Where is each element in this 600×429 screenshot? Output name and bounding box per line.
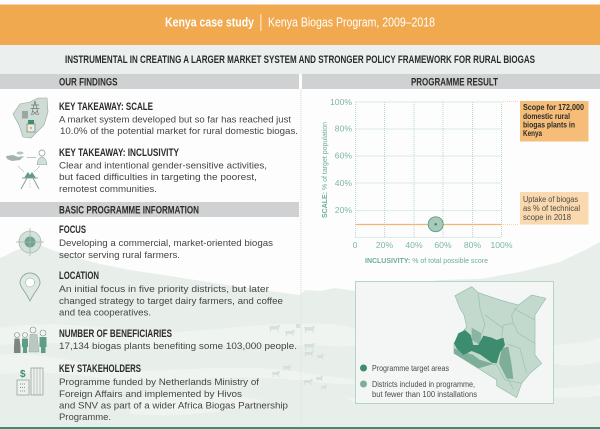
callout: uptake: Uptake of biogas: [523, 195, 578, 204]
x axis labels: 0: [353, 240, 358, 250]
text: focus: FOCUS: [59, 224, 86, 236]
text: key takeaway scale: [59, 101, 298, 137]
icon: focus target: [16, 228, 44, 256]
map of Kenya: [454, 287, 546, 398]
legend: Programme target areas: [372, 364, 449, 373]
x axis title: INCLUSIVITY: % of total possible score: [365, 256, 488, 265]
callout: scope: Scope for 172,000: [523, 102, 584, 112]
subtitle band: [0, 45, 600, 74]
y axis labels: 60%: [335, 150, 352, 160]
cattle: [269, 324, 327, 390]
icon: inclusivity: [6, 150, 47, 189]
callout: uptake: as % of technical: [523, 204, 580, 213]
y axis labels: 80%: [335, 124, 352, 134]
text: key takeaway inclusivity: but faced difficulties in targeting the poorest,: [59, 172, 257, 183]
text: key takeaway inclusivity: KEY TAKEAWAY: INCLUSIVITY: [59, 147, 180, 159]
text: key stakeholders: Foreign Affairs and implemented by Hivos: [59, 389, 242, 400]
callout: scope: Kenya: [523, 128, 542, 138]
text: location: and tea cooperatives.: [59, 308, 151, 318]
chart: programme result: [320, 97, 519, 265]
heading: programme result: PROGRAMME RESULT: [411, 76, 498, 88]
heading: our findings: [0, 74, 299, 89]
x axis labels: 80%: [464, 240, 481, 250]
y axis labels: 40%: [335, 178, 352, 188]
callout: scope: [520, 101, 588, 142]
x axis labels: 100%: [491, 240, 513, 250]
bottom band: [0, 427, 600, 429]
text: key takeaway scale: A market system developed but so far has reached just: [59, 114, 291, 126]
text: key stakeholders: Programme.: [59, 412, 111, 423]
text: key takeaway scale: KEY TAKEAWAY: SCALE: [59, 101, 153, 113]
heading: our findings: OUR FINDINGS: [59, 76, 118, 88]
icon: beneficiaries: [14, 327, 46, 353]
text: key stakeholders: Programme funded by Netherlands Ministry of: [59, 377, 259, 388]
legend: [360, 364, 477, 399]
callout: uptake: [520, 192, 588, 224]
header band: [0, 4, 600, 45]
text: key takeaway inclusivity: remotest communities.: [59, 184, 157, 195]
icon: stakeholders: $: [20, 369, 26, 380]
background landscape: [0, 242, 600, 427]
icon: location pin: [20, 273, 40, 301]
text: focus: [59, 224, 273, 261]
data point: [428, 217, 443, 232]
x axis labels: 40%: [405, 240, 423, 250]
icon: stakeholders: [17, 368, 43, 395]
text: key takeaway scale: 10.0% of the potential market for rural domestic biogas.: [60, 126, 298, 137]
x axis labels: 60%: [434, 240, 452, 250]
text: key stakeholders: and SNV as part of a wider Africa Biogas Partnership: [59, 400, 288, 412]
text: location: [59, 270, 283, 318]
callout: scope: domestic rural: [523, 111, 570, 121]
text: location: LOCATION: [59, 270, 99, 282]
y axis labels: 20%: [335, 205, 352, 215]
text: location: changed strategy to target dairy farmers, and coffee: [59, 296, 283, 307]
heading: basic programme information: BASIC PROGRAMME INFORMATION: [59, 204, 199, 216]
text: key takeaway inclusivity: [59, 147, 267, 195]
text: focus: Developing a commercial, market-oriented biogas: [59, 238, 273, 249]
y axis labels: 100%: [330, 97, 352, 107]
callout: uptake: scope in 2018: [523, 213, 572, 222]
text: key takeaway inclusivity: Clear and intentional gender-sensitive activities,: [59, 160, 267, 172]
legend: Districts included in programme,: [372, 380, 475, 389]
heading: basic programme information: [0, 202, 299, 217]
text: number of beneficiaries: 17,134 biogas plants benefiting some 103,000 people.: [59, 341, 297, 352]
heading: programme result: [302, 74, 600, 89]
callout: scope: biogas plants in: [523, 120, 575, 130]
y axis title: SCALE: % of target population: [320, 122, 329, 218]
panel: map: [356, 282, 554, 404]
text: number of beneficiaries: NUMBER OF BENEFICIARIES: [59, 328, 172, 340]
text: focus: sector serving rural farmers.: [59, 250, 180, 261]
text: location: An initial focus in five priority districts, but later: [59, 284, 270, 295]
x axis labels: [353, 240, 513, 250]
y axis labels: [330, 97, 352, 215]
header title: Kenya case study: [165, 14, 255, 30]
text: number of beneficiaries: [59, 328, 297, 352]
column divider: [300, 89, 302, 427]
x axis labels: 20%: [376, 240, 393, 250]
header band: Kenya Biogas Program, 2009–2018: [268, 14, 435, 30]
text: key stakeholders: [59, 363, 288, 423]
icon: scale map: [13, 98, 48, 138]
text: key stakeholders: KEY STAKEHOLDERS: [59, 363, 141, 375]
legend: but fewer than 100 installations: [372, 390, 477, 399]
